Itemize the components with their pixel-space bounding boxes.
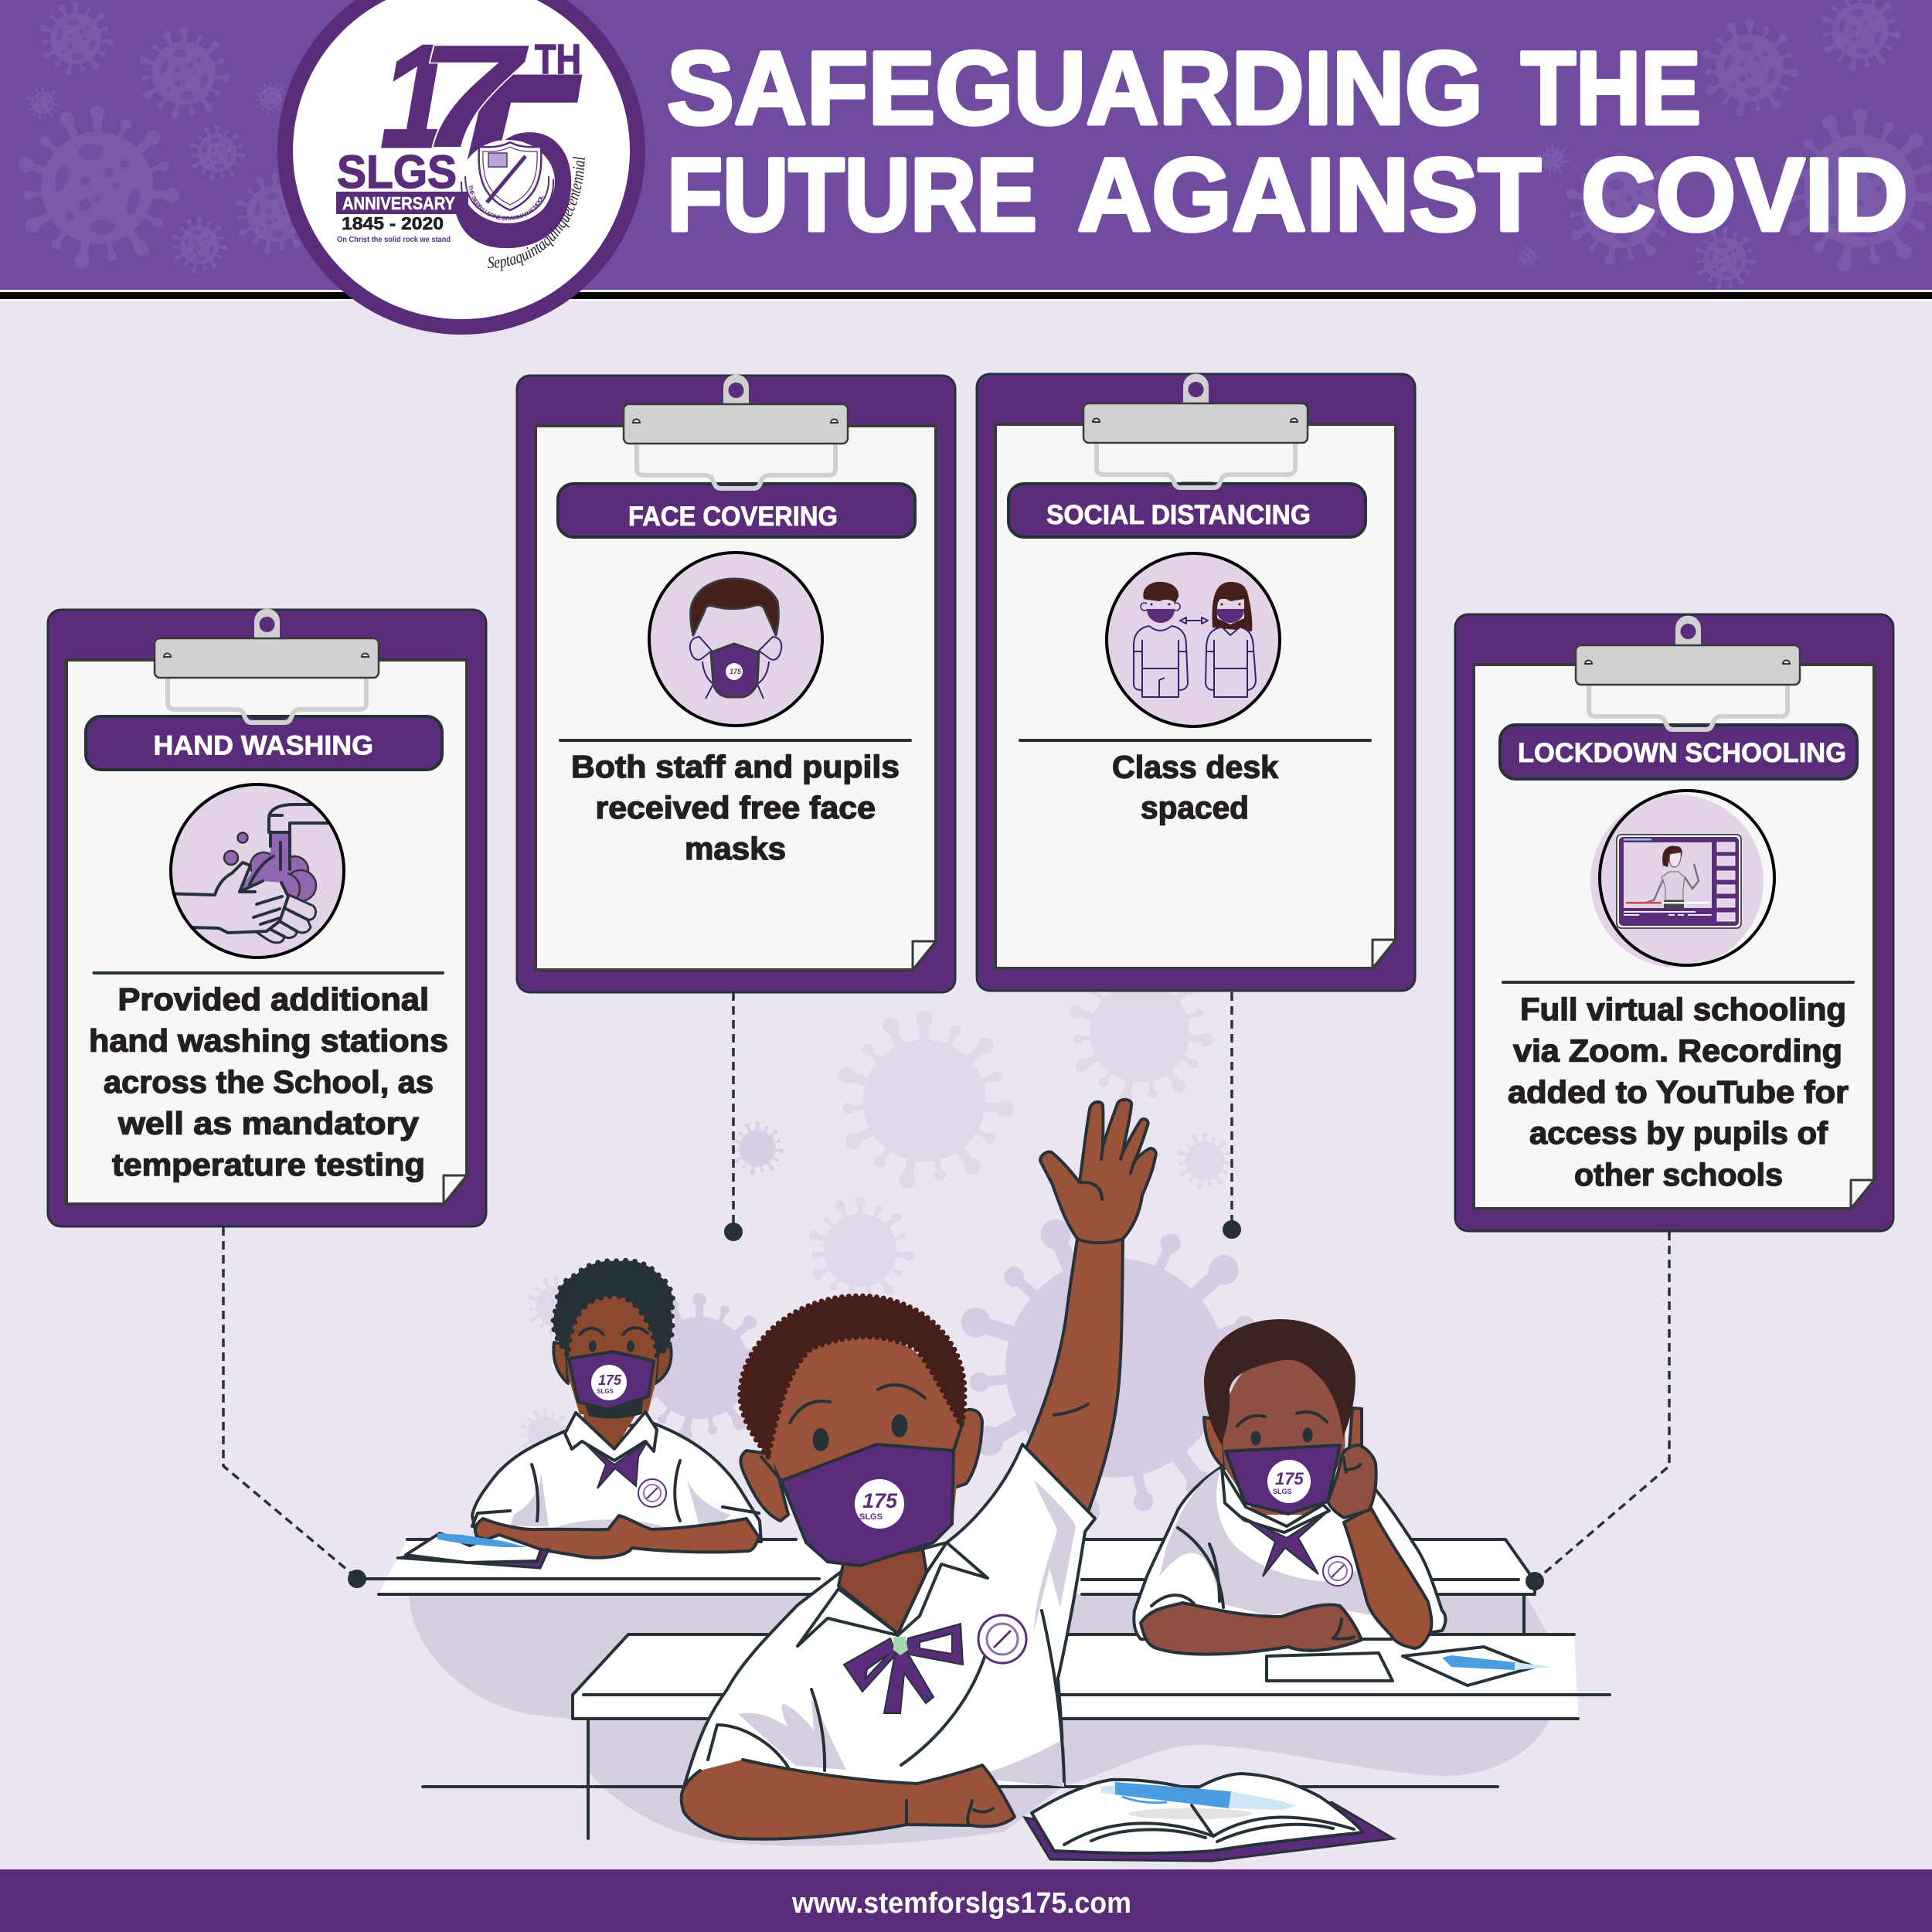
mask: SLGS	[597, 1388, 614, 1395]
description: other schools	[1574, 1157, 1783, 1192]
description	[89, 981, 448, 1182]
badge	[1323, 1556, 1352, 1586]
logo crest: THE SIERRA LEONE GRAMMAR SCHOOL	[468, 185, 544, 220]
mask: 175	[862, 1489, 898, 1512]
description: via Zoom. Recording	[1513, 1032, 1842, 1068]
panel: face covering	[517, 374, 955, 992]
bow tie	[844, 1624, 963, 1713]
connector: social distancing	[1223, 992, 1241, 1239]
header virus pattern	[16, 0, 1932, 291]
background viruses	[520, 959, 1277, 1529]
mask: SLGS	[1273, 1488, 1292, 1495]
logo badge	[277, 0, 645, 335]
connector: face covering	[724, 992, 743, 1241]
resting forearm	[682, 1760, 1015, 1839]
description: access by pupils of	[1529, 1115, 1828, 1151]
mask	[569, 1352, 654, 1410]
raised arm	[1024, 1239, 1123, 1519]
head	[1204, 1319, 1362, 1515]
icon: online lesson tablet	[1590, 791, 1774, 968]
heading pill: HAND WASHING	[153, 731, 373, 760]
description: across the School, as	[104, 1064, 434, 1100]
description: spaced	[1141, 790, 1249, 825]
neck	[838, 1549, 927, 1634]
front desk	[573, 1634, 1610, 1838]
icon: two people apart	[1107, 553, 1280, 726]
rule	[1020, 739, 1370, 742]
eyes and brows	[790, 1385, 925, 1451]
connector: hand washing	[223, 1227, 366, 1588]
description: received free face	[595, 790, 876, 825]
description: well as mandatory	[117, 1105, 419, 1141]
rule	[560, 739, 910, 742]
footer: www.stemforslgs175.com	[791, 1887, 1131, 1920]
heading pill: LOCKDOWN SCHOOLING	[1518, 738, 1846, 768]
shirt	[472, 1423, 761, 1542]
title: FUTURE	[667, 138, 1037, 253]
description: added to YouTube for	[1508, 1074, 1849, 1110]
heading pill: SOCIAL DISTANCING	[1046, 500, 1311, 530]
connector: lockdown schooling	[1526, 1232, 1669, 1590]
description: temperature testing	[112, 1147, 425, 1182]
panel: social distancing	[977, 374, 1415, 991]
description: Class desk	[1112, 750, 1278, 785]
logo numerals 175th: 1	[380, 15, 453, 179]
school badge	[978, 1615, 1026, 1663]
icon: face with mask	[649, 553, 822, 726]
panel: hand washing	[48, 609, 486, 1226]
desk paper	[1267, 1653, 1393, 1681]
face	[553, 1260, 673, 1451]
desk shadow blobs	[409, 1592, 1577, 1846]
panel: lockdown schooling	[1455, 614, 1893, 1231]
ears	[740, 1410, 982, 1521]
title: THE	[1521, 31, 1701, 146]
title: SAFEGUARDING	[667, 31, 1483, 146]
description	[1508, 992, 1849, 1192]
mask: 175	[598, 1372, 622, 1388]
logo years: 1845 - 2020	[342, 213, 444, 233]
raised hand	[1040, 1100, 1156, 1243]
description	[571, 749, 900, 866]
mask	[1226, 1445, 1340, 1514]
heading pill: FACE COVERING	[628, 502, 838, 532]
mask: SLGS	[859, 1512, 883, 1522]
logo script text: Septaquintaquinquecentennial	[488, 156, 585, 271]
mask	[761, 1422, 963, 1566]
logo crest	[461, 140, 555, 223]
collar and scarf	[565, 1412, 657, 1488]
teacher	[1646, 846, 1699, 908]
logo numerals 175th: 7	[417, 15, 530, 179]
shirt	[1134, 1467, 1445, 1639]
rule	[94, 971, 443, 975]
back desk	[357, 1539, 1535, 1633]
badge	[638, 1479, 666, 1507]
logo numerals 175th	[380, 15, 585, 299]
description: Both staff and pupils	[571, 749, 900, 784]
description: hand washing stations	[89, 1023, 448, 1059]
left forearm	[1141, 1603, 1362, 1655]
mask: 175	[1275, 1469, 1304, 1488]
desk paper with pen	[1403, 1647, 1551, 1685]
title: COVID	[1581, 138, 1908, 253]
logo numerals 175th: 5	[452, 22, 585, 299]
description: Full virtual schooling	[1520, 992, 1846, 1027]
prop arm and hand	[1328, 1445, 1431, 1648]
logo motto: On Christ the solid rock we stand	[337, 235, 451, 244]
icon: face with mask: 175	[730, 668, 742, 675]
floor line	[423, 1785, 1498, 1788]
person left	[1134, 582, 1188, 697]
open book	[396, 1533, 549, 1568]
person right	[1206, 582, 1256, 697]
collar	[798, 1543, 988, 1646]
icon: hand washing	[158, 784, 344, 957]
description: masks	[685, 831, 786, 866]
arrow	[1180, 617, 1208, 624]
header band	[0, 0, 1932, 301]
rule	[1503, 981, 1853, 984]
title	[667, 31, 1908, 253]
logo numerals 175th: TH	[535, 36, 581, 83]
student: front with raised hand	[682, 1100, 1156, 1839]
hair	[740, 1296, 964, 1457]
collar and scarf	[1222, 1468, 1329, 1577]
description: Provided additional	[117, 981, 429, 1017]
heading pill	[1009, 484, 1366, 537]
anniversary bar: ANNIVERSARY	[342, 193, 455, 213]
logo SLGS wordmark: SLGS	[337, 146, 457, 198]
heading pill	[86, 716, 442, 770]
student: back left	[396, 1260, 761, 1568]
heading pill	[558, 484, 915, 537]
open book with pen	[1025, 1774, 1393, 1861]
pen	[1101, 1782, 1297, 1810]
footer	[0, 1869, 1932, 1932]
fingers	[255, 895, 316, 943]
heading pill	[1500, 725, 1857, 779]
title: AGAINST	[1077, 138, 1541, 253]
forearms	[475, 1515, 759, 1558]
face	[768, 1336, 962, 1566]
description	[1112, 750, 1278, 825]
shirt	[684, 1444, 1095, 1787]
student: right	[1134, 1319, 1551, 1685]
